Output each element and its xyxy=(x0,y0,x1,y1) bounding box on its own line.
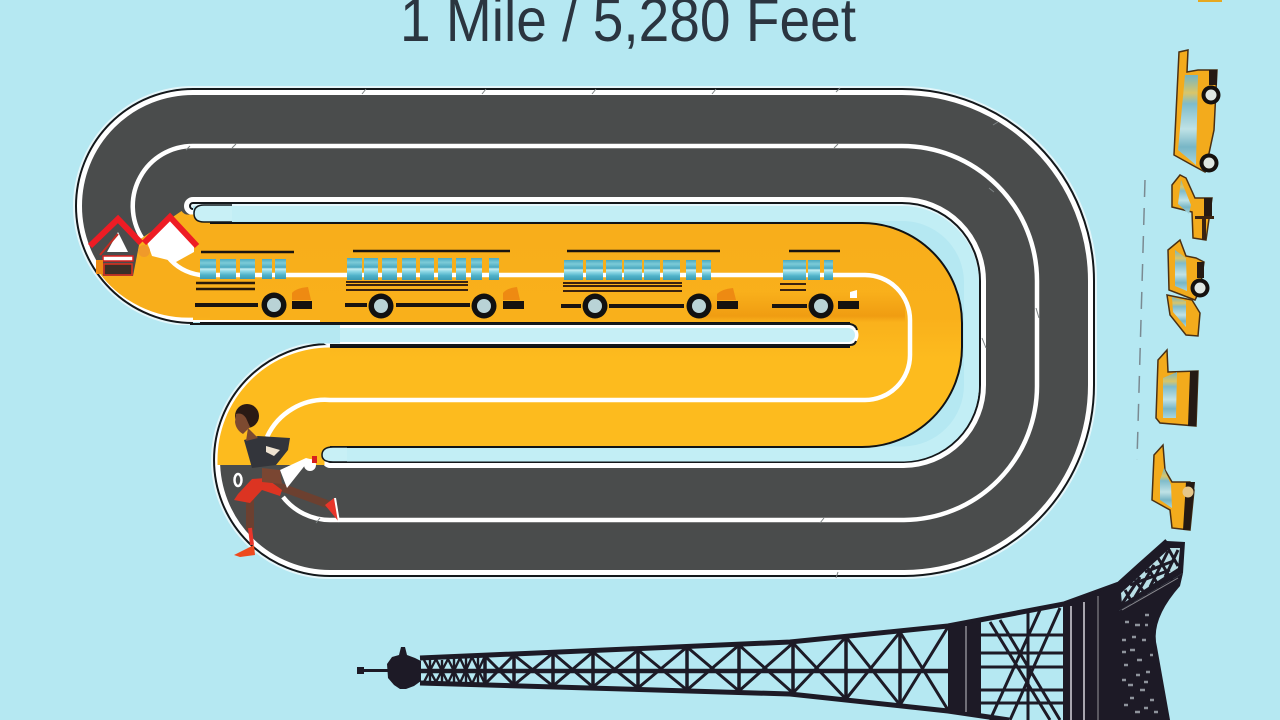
track: white centre line xyxy=(133,146,1037,520)
track: dark asphalt section xyxy=(133,146,1037,519)
icon: vertical bus D xyxy=(1156,350,1198,426)
track: rounded end of upper gap xyxy=(194,205,232,222)
school bus 3 xyxy=(561,251,738,318)
track: yellow section xyxy=(139,240,912,465)
tower: first platform column xyxy=(948,621,981,716)
track: light gap between dark and yellow lanes xyxy=(215,213,972,454)
head xyxy=(235,404,259,441)
tower: outer chords of the shaft xyxy=(420,541,1167,658)
tower: dense upper lattice xyxy=(424,656,485,684)
tower: antenna and top cap xyxy=(357,647,421,689)
icon: vertical bus C xyxy=(1167,240,1210,336)
tower: base foot lattice xyxy=(1117,541,1185,612)
track: rounded end of lower gap xyxy=(322,447,347,462)
track: inner gap between yellow lanes xyxy=(160,324,857,345)
school bus 1 xyxy=(195,252,312,318)
tower: base leg xyxy=(1117,573,1183,720)
icon: house 1 xyxy=(90,219,141,276)
shorts xyxy=(234,478,282,503)
icon: vertical bus E xyxy=(1152,445,1195,530)
arm and hand xyxy=(262,446,317,488)
tower: lower lattice xyxy=(981,608,1064,720)
dashed measuring line xyxy=(1137,180,1145,460)
serpentine track xyxy=(133,88,1039,578)
tower: cross braces xyxy=(485,627,948,710)
icon: vertical bus B xyxy=(1172,175,1214,240)
track: thin lane ticks xyxy=(186,88,1039,578)
school bus 4 xyxy=(772,251,859,318)
runner xyxy=(234,404,339,557)
icon: clipped bus at top edge xyxy=(1198,0,1222,2)
tower: vertical posts xyxy=(485,632,900,705)
front leg and shoe xyxy=(234,498,255,557)
eiffel tower lying on its side xyxy=(357,541,1185,720)
back leg and shoe xyxy=(278,486,339,522)
torso xyxy=(244,436,290,468)
school bus 2 xyxy=(345,251,524,318)
ring on track xyxy=(234,474,242,486)
house icons at the start xyxy=(90,217,197,276)
tower: lower solid section xyxy=(1063,585,1119,720)
icon: house 2 xyxy=(138,217,197,262)
vertical stack of school buses xyxy=(1152,0,1222,530)
icon: vertical bus A xyxy=(1174,50,1220,172)
